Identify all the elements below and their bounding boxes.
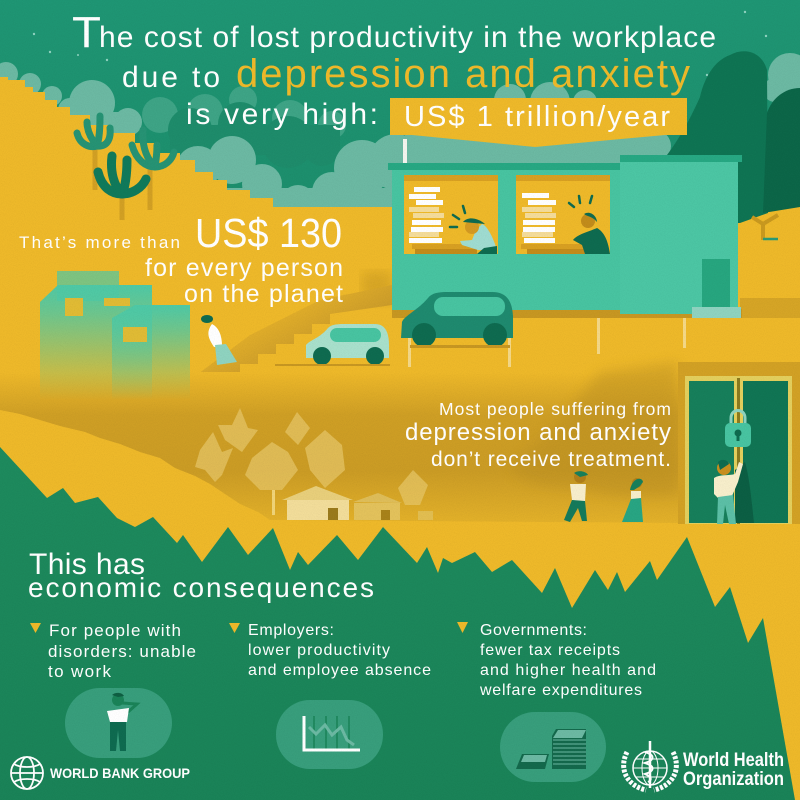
door step: [692, 307, 741, 318]
side roof: [620, 155, 742, 162]
door shadow: [735, 462, 754, 523]
heading: economic consequences: economic consequences: [28, 572, 374, 603]
sky background: [0, 0, 800, 320]
banner: US$ 1 trillion/year: [390, 98, 687, 147]
title: [72, 8, 716, 131]
building: [388, 139, 742, 367]
shaded ascending stairs: [190, 285, 392, 395]
title: he cost of lost productivity in the workplace: [99, 21, 716, 54]
callout: US$ 130 per person: US$ 130: [195, 210, 342, 256]
stars: [33, 11, 767, 76]
padlock: [725, 410, 751, 447]
callout: treatment: Most people suffering from: [439, 399, 671, 419]
logo: World Health Organization: World Health: [683, 750, 784, 771]
pale green car: [275, 324, 390, 366]
bullet: employers: Employers:: [248, 622, 334, 639]
person on stairs: [201, 315, 237, 365]
person at door: [714, 460, 743, 524]
callout: treatment: [405, 399, 671, 471]
shaded valley with stairs: [0, 362, 678, 523]
parking lines: [408, 318, 686, 367]
worker 2: [569, 196, 610, 254]
side block: [620, 158, 738, 314]
green lower panel with jagged mountain edge: [0, 447, 795, 800]
logo: World Bank Group: [11, 757, 190, 789]
bullet: people with disorders: For people with: [49, 621, 181, 640]
worker 1: [450, 206, 497, 254]
left door: [689, 381, 734, 523]
title: depression and anxiety: [236, 52, 690, 96]
faded trees and houses: [195, 408, 433, 520]
bullet: governments: and higher health and: [480, 662, 656, 679]
walking man: [564, 471, 588, 522]
icon: person unable to work: [65, 688, 172, 758]
trees behind building: [667, 51, 800, 240]
callout: US$ 130 per person: [19, 210, 343, 308]
callout: US$ 130 per person: for every person: [145, 254, 343, 282]
right door: [743, 381, 788, 523]
ground shading right: [362, 272, 800, 318]
bullet: people with disorders: to work: [48, 662, 112, 681]
callout: US$ 130 per person: That’s more than: [19, 233, 180, 252]
bullet: governments: welfare expenditures: [479, 682, 642, 699]
banner: US$ 1 trillion/year: US$ 1 trillion/year: [404, 101, 670, 133]
door: [702, 259, 730, 307]
callout: US$ 130 per person: on the planet: [184, 280, 343, 308]
bullet: governments: [457, 622, 656, 699]
bullet: governments: fewer tax receipts: [480, 642, 620, 659]
window 1: [404, 175, 498, 254]
bullet: people with disorders: [30, 621, 196, 681]
callout: treatment: don’t receive treatment.: [431, 448, 671, 471]
ground strip: [392, 309, 742, 318]
title: due to: [122, 61, 220, 94]
bullet: employers: [229, 622, 431, 679]
clouds: [0, 53, 800, 221]
antenna: [403, 139, 407, 163]
bullet: governments: Governments:: [480, 622, 587, 639]
title: is very high:: [186, 98, 378, 131]
heading: economic consequences: [28, 548, 374, 603]
icon: falling chart: [276, 700, 383, 769]
walking woman: [622, 478, 643, 522]
blurred left houses: [40, 271, 190, 400]
roof: [388, 163, 621, 170]
main block: [392, 165, 621, 310]
title: T: [72, 8, 101, 57]
bullet: employers: and employee absence: [248, 662, 431, 679]
bullet: people with disorders: disorders: unable: [48, 642, 196, 661]
callout: treatment: depression and anxiety: [405, 419, 671, 446]
left trees: [77, 116, 174, 220]
gate with lock: [678, 362, 800, 524]
yellow field right of building: [730, 205, 800, 335]
bullet: employers: lower productivity: [248, 642, 390, 659]
window 2: [516, 175, 610, 254]
dark green car: [401, 292, 513, 348]
logo: World Health Organization: [624, 741, 784, 790]
icon: stacks of money: [500, 712, 606, 782]
heading: economic consequences: This has: [29, 548, 145, 581]
logo: World Bank Group: WORLD BANK GROUP: [50, 765, 190, 781]
logo: World Health Organization: Organization: [683, 769, 784, 790]
